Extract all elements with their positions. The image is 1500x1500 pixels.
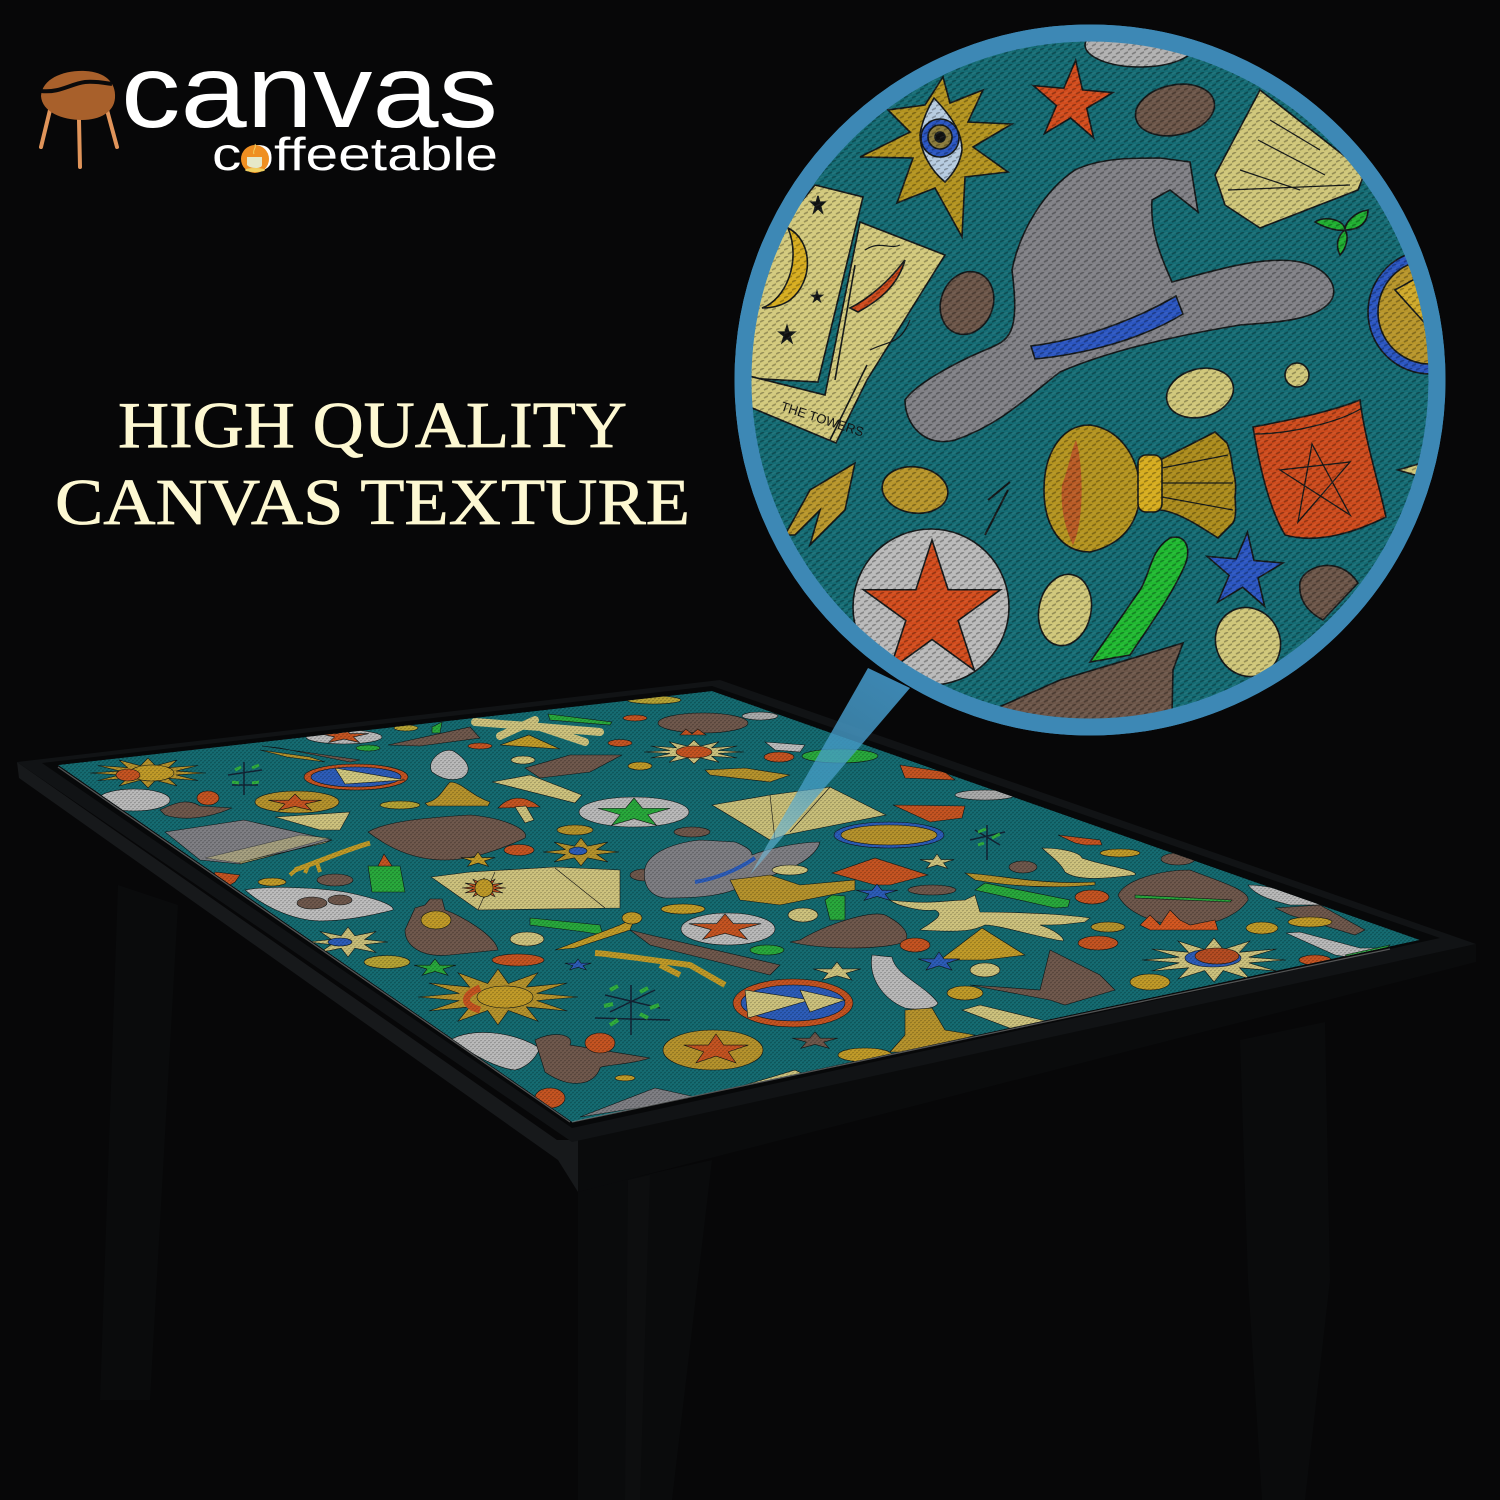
- callout beam: [750, 668, 910, 875]
- headline: CANVAS TEXTURE: [55, 466, 690, 539]
- icon: small star edge: [1396, 463, 1418, 476]
- icon: paper scroll: [1215, 90, 1365, 228]
- table legs: [100, 885, 1330, 1500]
- logo cup icon: [241, 144, 269, 173]
- icon: yellow seed: [1285, 363, 1309, 387]
- logo wordmark: canvas: [121, 34, 498, 150]
- icon: green sprout: [1315, 210, 1368, 255]
- right and lower items: [418, 787, 1390, 1117]
- icon: red candle: [1253, 400, 1386, 538]
- headline: HIGH QUALITY: [118, 389, 627, 462]
- icon: green pestle: [1090, 537, 1188, 662]
- icon: golden goblet: [1044, 425, 1236, 552]
- top row items: [90, 696, 1015, 800]
- table top canvas: [58, 691, 1420, 1122]
- icon: brown mortar: [999, 642, 1184, 718]
- left and center items: [98, 750, 780, 975]
- icon: eye star: [860, 77, 1012, 237]
- icon: gold bolt: [785, 463, 855, 545]
- logo: [41, 34, 498, 180]
- icon: brown stone: [939, 270, 995, 336]
- icon: brown stone right: [1300, 565, 1358, 620]
- magnifier circle: [730, 20, 1492, 740]
- icon: gold rune stone: [881, 466, 949, 514]
- icon: beige stone lower: [1038, 574, 1092, 646]
- icon: tarot cards: THE TOWERS: [779, 399, 866, 440]
- wizard hat on table: [644, 840, 820, 898]
- icon: wizard hat: [905, 158, 1334, 442]
- table frame: [17, 680, 1476, 1192]
- headline: [55, 389, 690, 539]
- icon: pentacle disc right: [1367, 254, 1428, 375]
- icon: blue star: [1203, 529, 1285, 608]
- icon: arrow mark: [985, 482, 1010, 535]
- logo icon: coffee bean table: [41, 71, 117, 167]
- icon: pentagram disc: [853, 529, 1009, 685]
- icon: tarot cards: [745, 185, 945, 443]
- icon: beige rune lower: [1214, 606, 1282, 678]
- icon: beige rune stone: [1166, 367, 1234, 419]
- icon: red star: [1029, 57, 1115, 139]
- icon: white orb top: [1084, 42, 1189, 68]
- icon: brown stone top: [1134, 83, 1216, 137]
- logo tagline: coffeetable: [212, 128, 498, 180]
